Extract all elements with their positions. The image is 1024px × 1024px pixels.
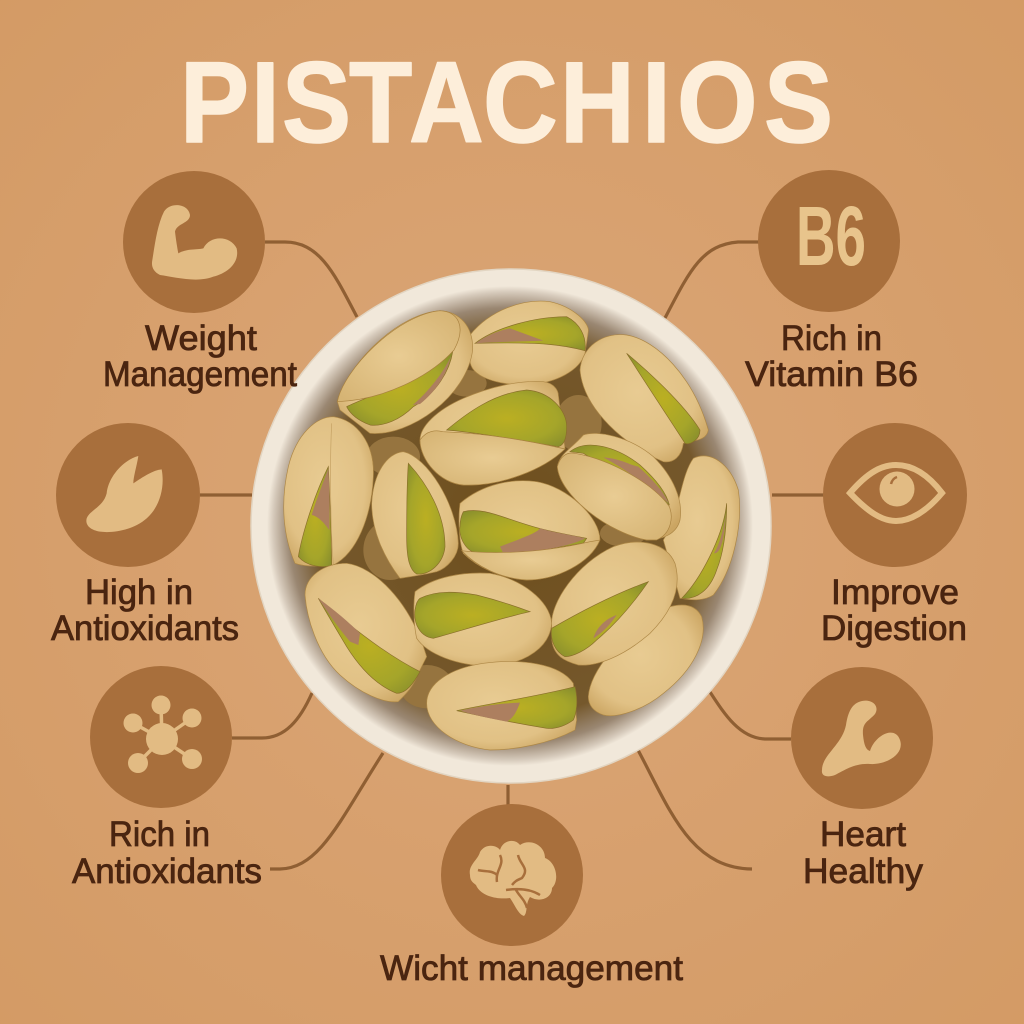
badge circle xyxy=(56,423,200,567)
label: High in xyxy=(85,573,193,612)
icon: B6: B6 xyxy=(796,189,866,283)
label: Digestion xyxy=(821,609,967,648)
nut: second left vertical xyxy=(372,452,458,578)
icon: flexed arm xyxy=(152,205,237,280)
badge circle xyxy=(123,171,265,313)
connector lines xyxy=(200,242,825,869)
badge circle xyxy=(823,423,967,567)
badge circle xyxy=(791,667,933,809)
benefit: Improve Digestion xyxy=(821,423,967,648)
icon: nut shape xyxy=(86,456,163,532)
benefit: Heart Healthy xyxy=(791,667,933,891)
nut: right of centre xyxy=(557,433,681,540)
nut: left vertical xyxy=(284,417,373,567)
label: Rich in xyxy=(781,319,882,358)
label: Healthy xyxy=(803,852,924,891)
nut: bottom xyxy=(427,662,577,750)
label: Vitamin B6 xyxy=(745,355,918,394)
nut: upper left xyxy=(337,311,473,434)
nut: lower right open xyxy=(551,542,677,665)
icon: eye xyxy=(850,465,942,521)
nut: right vertical xyxy=(663,456,740,600)
nut: top middle xyxy=(470,301,588,385)
bowl rim xyxy=(251,269,771,783)
label: Rich in xyxy=(109,815,210,854)
icon: brain xyxy=(470,841,556,916)
nut: plain lower right xyxy=(588,605,703,716)
badge circle xyxy=(90,666,232,808)
benefit: Rich in Antioxidants xyxy=(72,666,262,891)
nut: centre xyxy=(459,481,600,580)
bowl interior xyxy=(267,286,753,766)
bowl of pistachios xyxy=(251,269,771,783)
icon: heart organ shape xyxy=(822,701,901,776)
badge circle xyxy=(441,804,583,946)
nut: lower centre xyxy=(414,573,552,666)
pistachios xyxy=(284,301,740,750)
label: Antioxidants xyxy=(51,609,239,648)
nuts behind xyxy=(363,370,647,708)
label: Wicht management xyxy=(380,949,683,988)
benefit: Rich in Vitamin B6 xyxy=(745,170,918,394)
nut: centre top xyxy=(420,381,567,485)
label: Management xyxy=(103,355,297,394)
label: Improve xyxy=(831,573,959,612)
benefit: Weight Management xyxy=(103,171,297,394)
nut: upper right xyxy=(580,335,708,462)
benefit: Wicht management xyxy=(380,804,683,988)
badge circle xyxy=(758,170,900,312)
icon: molecule xyxy=(124,696,202,773)
benefit: High in Antioxidants xyxy=(51,423,239,648)
label: Heart xyxy=(820,815,906,854)
nut: lower left xyxy=(305,563,427,702)
label: Weight xyxy=(145,319,257,358)
title: PISTACHIOS xyxy=(180,39,833,167)
label: Antioxidants xyxy=(72,852,262,891)
